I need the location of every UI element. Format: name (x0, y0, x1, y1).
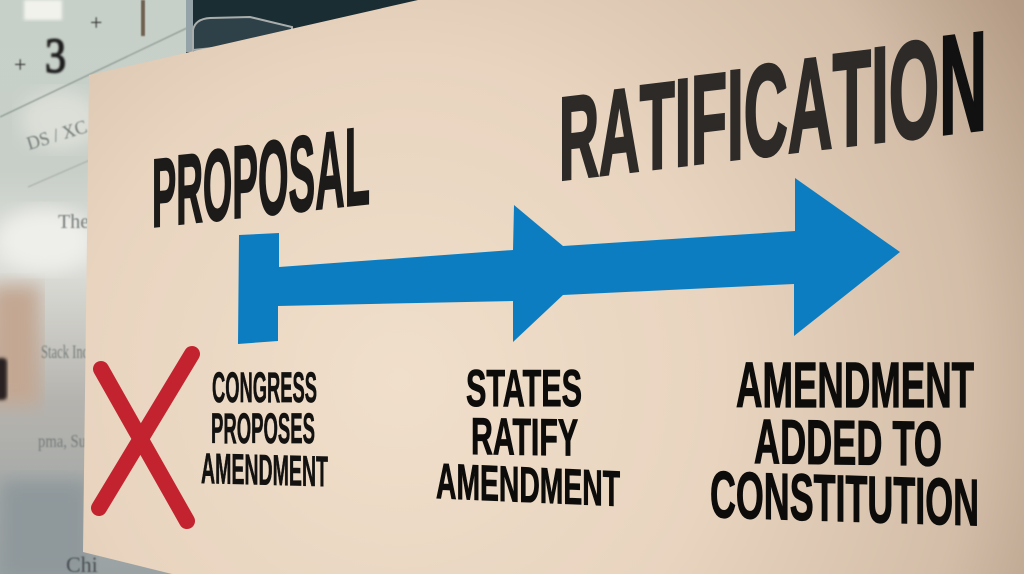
background wall lettering: Stack Ind (41, 342, 89, 363)
background wall lettering (14, 10, 102, 574)
background wall lettering: The (58, 211, 89, 233)
text: states ratify amendment: STATES (466, 360, 582, 418)
text: amendment added to constitution (710, 349, 979, 539)
icon: red x (99, 354, 192, 521)
infographic scene: PROPOSES (211, 405, 315, 453)
background wall lettering: + (14, 52, 26, 77)
background wall lettering: DS / XC (24, 117, 90, 155)
text: states ratify amendment: AMENDMENT (436, 453, 620, 517)
infographic scene: AMENDMENT (201, 445, 328, 496)
infographic scene: CONGRESS (212, 364, 317, 412)
background wall lettering: + (90, 10, 102, 35)
text: states ratify amendment: RATIFY (471, 408, 578, 467)
text: congress proposes amendment (201, 364, 328, 496)
background wall lettering: 3 (45, 27, 66, 83)
background wall lettering: pma, Su (38, 431, 86, 451)
heading: proposal: PROPOSAL (152, 103, 370, 251)
timeline arrow (238, 178, 900, 344)
text: states ratify amendment (436, 360, 620, 517)
